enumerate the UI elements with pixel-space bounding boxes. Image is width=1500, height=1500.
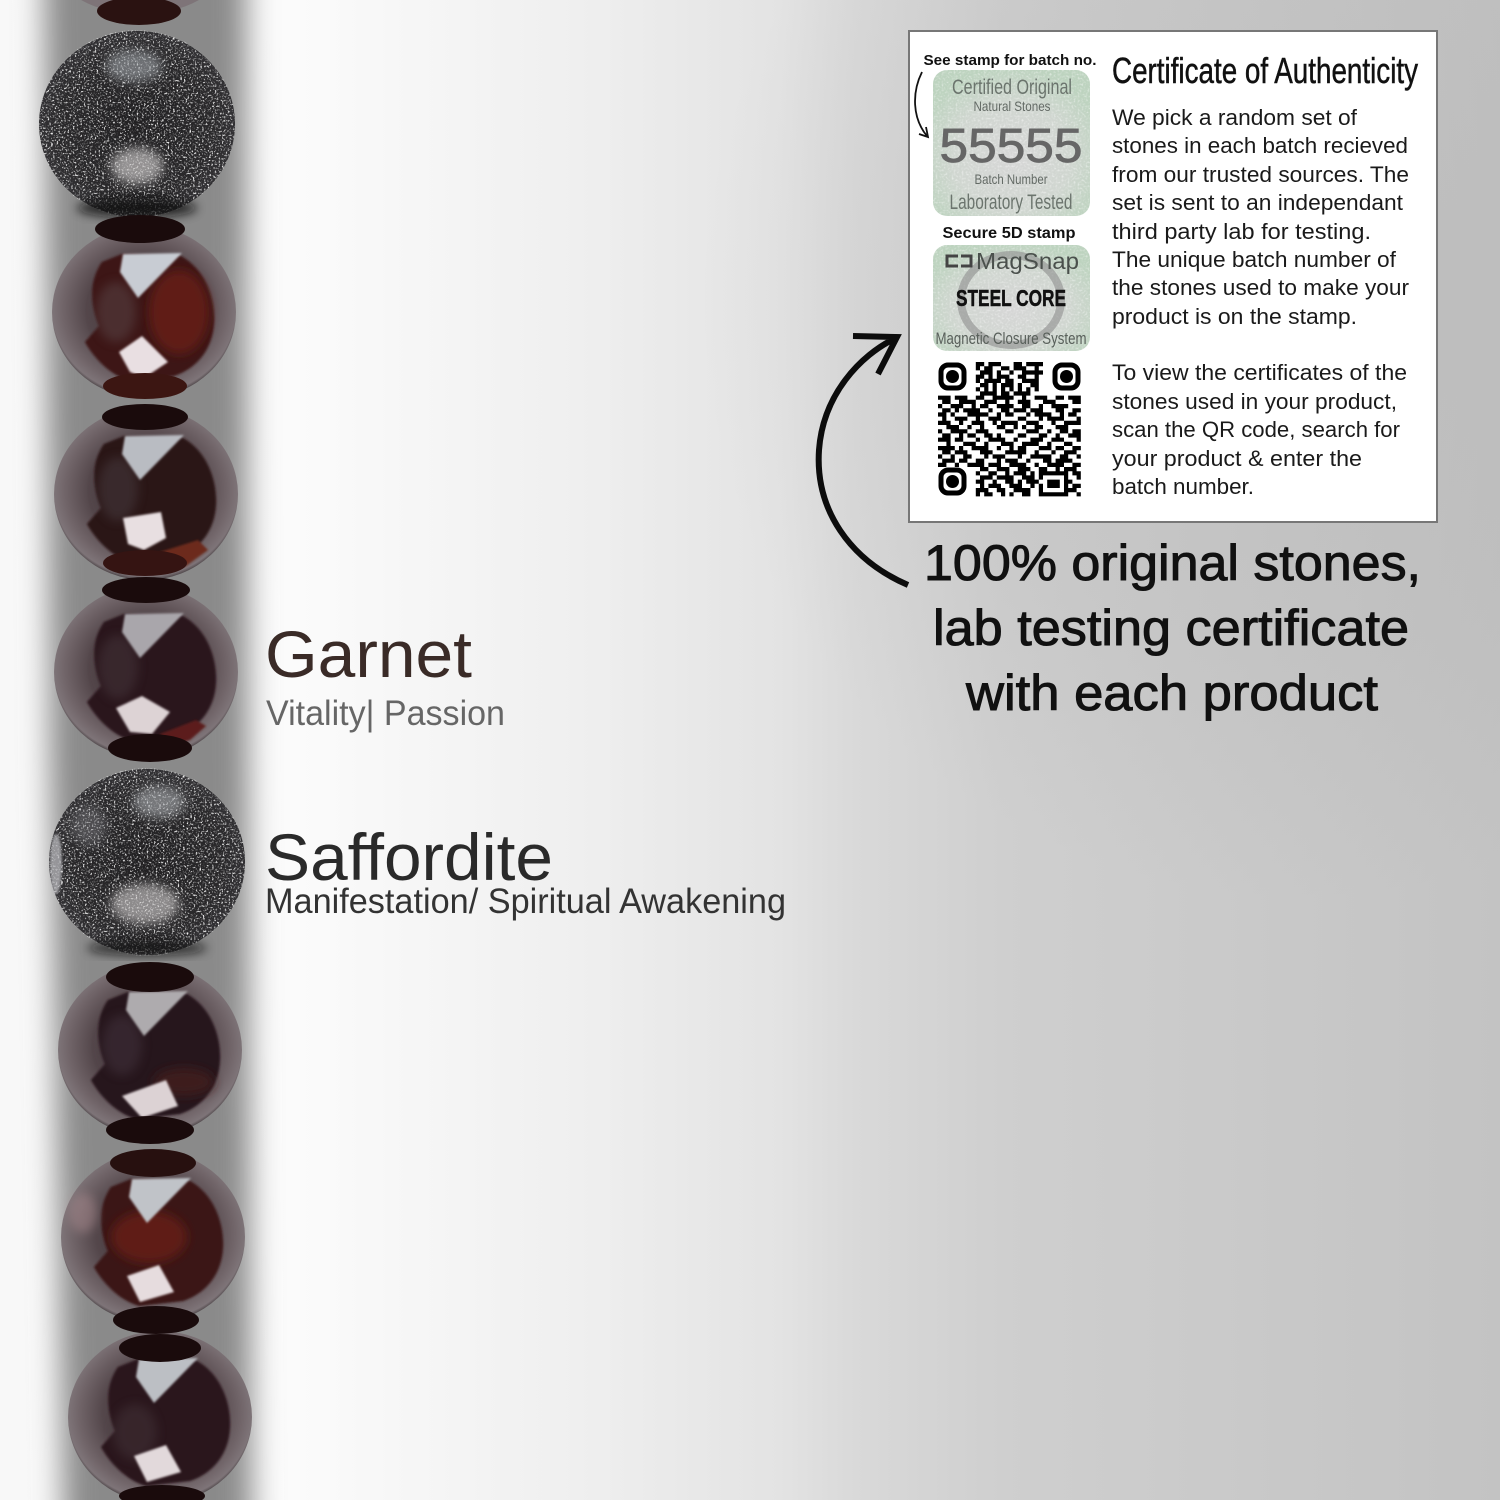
bead: lava stone 1 [37, 28, 237, 220]
bead: lava stone 2 [47, 766, 247, 958]
bead: top partial [58, 0, 222, 14]
batch stamp: Laboratory Tested [950, 191, 1072, 214]
heading: Garnet: Garnet [265, 617, 472, 691]
stamp heading: Secure 5D stamp [942, 225, 1076, 242]
label: Saffordite [265, 820, 786, 921]
batch stamp: Batch Number [974, 171, 1048, 187]
certificate body text 1 [1112, 105, 1409, 329]
arrow: curved arrow to certificate [819, 336, 908, 585]
icon: small arrow to stamp [915, 72, 928, 137]
certificate body text 2: scan the QR code, search for [1112, 417, 1400, 442]
certificate body text 2: stones used in your product, [1112, 389, 1397, 414]
bead: garnet 4 [58, 964, 242, 1136]
security stamp [933, 245, 1090, 351]
certificate body text 1: the stones used to make your [1112, 275, 1409, 300]
spacer beads [95, 0, 205, 1500]
bead: garnet 5 [61, 1151, 245, 1323]
batch stamp: 55555 [940, 120, 1082, 173]
certificate body text 1: product is on the stamp. [1112, 304, 1357, 329]
security stamp: MagSnap [976, 248, 1079, 274]
bead: garnet 6 [68, 1331, 252, 1500]
certificate body text 1: third party lab for testing. [1112, 219, 1371, 244]
callout: original stones: with each product [965, 665, 1378, 721]
panel: certificate card [909, 31, 1437, 522]
bead: garnet 2 [54, 408, 238, 580]
certificate body text 2: batch number. [1112, 474, 1254, 499]
bead strand shadow [44, 0, 252, 1500]
bead: garnet 1 [52, 226, 236, 398]
bead strand [37, 0, 252, 1500]
certificate body text 1: set is sent to an independant [1112, 190, 1403, 215]
certificate body text 1: The unique batch number of [1112, 247, 1397, 272]
stamp caption: See stamp for batch no. [924, 53, 1096, 69]
label: Garnet [265, 617, 505, 733]
certificate body text 2: your product & enter the [1112, 446, 1362, 471]
certificate body text 2: To view the certificates of the [1112, 360, 1407, 385]
security stamp: Magnetic Closure System [936, 329, 1086, 348]
callout: original stones: lab testing certificate [933, 600, 1409, 656]
certificate body text 1: stones in each batch recieved [1112, 133, 1408, 158]
certificate heading: Certificate of Authenticity [1112, 50, 1418, 91]
subheading: Vitality Passion: Vitality| Passion [266, 694, 505, 733]
certificate body text 1: We pick a random set of [1112, 105, 1358, 130]
certificate body text 2 [1112, 360, 1407, 499]
subheading: Manifestation Spiritual Awakening: Manifestation/ Spiritual Awakening [265, 882, 786, 921]
callout: original stones: 100% original stones, [924, 535, 1421, 591]
callout: original stones [924, 535, 1421, 721]
security stamp: STEEL CORE [956, 285, 1066, 311]
batch stamp: Natural Stones [974, 98, 1050, 114]
certificate body text 1: from our trusted sources. The [1112, 162, 1409, 187]
heading: Saffordite: Saffordite [265, 820, 553, 894]
batch stamp [933, 70, 1090, 216]
batch stamp: Certified Original [952, 76, 1072, 99]
QR code [938, 364, 1081, 494]
bead: garnet 3 [54, 586, 238, 758]
